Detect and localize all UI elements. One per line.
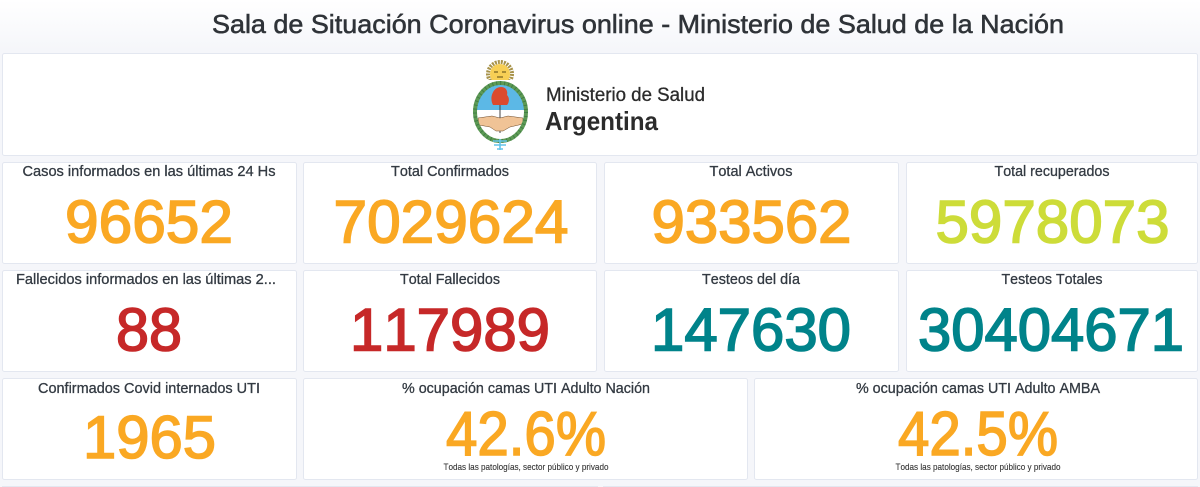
panel: total recuperados: 5978073 bbox=[936, 188, 1170, 256]
panel: internados UTI bbox=[2, 378, 296, 480]
logo text: Ministerio de Salud bbox=[546, 85, 705, 106]
panel: testeos del día bbox=[604, 270, 898, 372]
panel: testeos del día: Testeos del día bbox=[702, 271, 801, 288]
panel: casos 24 hs bbox=[2, 162, 296, 264]
panel: total fallecidos: 117989 bbox=[350, 296, 550, 364]
panel: ocupación AMBA: % ocupación camas UTI Adulto AMBA bbox=[856, 380, 1100, 397]
panel: total confirmados bbox=[304, 162, 596, 264]
panel: total confirmados: Total Confirmados bbox=[391, 163, 509, 180]
panel: total fallecidos: Total Fallecidos bbox=[400, 271, 500, 288]
logo text bbox=[545, 85, 705, 136]
panel: casos 24 hs: Casos informados en las últimas 24 Hs bbox=[22, 163, 276, 180]
panel: testeos del día: 147630 bbox=[651, 296, 851, 364]
panel: testeos totales bbox=[906, 270, 1198, 372]
panel: testeos totales: Testeos Totales bbox=[1002, 271, 1102, 288]
panel: casos 24 hs: 96652 bbox=[65, 188, 233, 256]
logo text: Argentina bbox=[545, 106, 659, 136]
panel: ocupación AMBA: 42.5% bbox=[898, 400, 1058, 469]
panel: internados UTI: 1965 bbox=[83, 404, 216, 471]
panel: fallecidos 24 hs: Fallecidos informados en las últimas 2... bbox=[16, 271, 276, 288]
panel: total activos: 933562 bbox=[652, 188, 852, 256]
panel: total activos: Total Activos bbox=[710, 163, 792, 180]
panel: total activos bbox=[604, 162, 898, 264]
panel: total confirmados: 7029624 bbox=[334, 188, 568, 256]
panel: total recuperados bbox=[906, 162, 1198, 264]
panel: total recuperados: Total recuperados bbox=[994, 163, 1110, 180]
panel: ocupación Nación: 42.6% bbox=[446, 400, 606, 469]
panel: ocupación AMBA: Todas las patologías, sector público y privado bbox=[896, 462, 1060, 472]
panel: total fallecidos bbox=[304, 270, 596, 372]
panel: fallecidos 24 hs: 88 bbox=[116, 296, 182, 364]
panel: ocupación Nación: Todas las patologías, sector público y privado bbox=[444, 462, 608, 472]
panel: fallecidos 24 hs bbox=[2, 270, 296, 372]
panel: ocupación Nación bbox=[304, 378, 748, 480]
panel: logo bbox=[2, 54, 1198, 156]
panel: testeos totales: 30404671 bbox=[918, 296, 1184, 364]
panel: ocupación AMBA bbox=[754, 378, 1198, 480]
title: Sala de Situación Coronavirus online - Ministerio de Salud de la Nación bbox=[212, 9, 1064, 39]
panel: ocupación Nación: % ocupación camas UTI Adulto Nación bbox=[402, 380, 650, 397]
panel: internados UTI: Confirmados Covid internados UTI bbox=[38, 380, 260, 397]
icon: coat of arms of Argentina bbox=[475, 62, 526, 150]
